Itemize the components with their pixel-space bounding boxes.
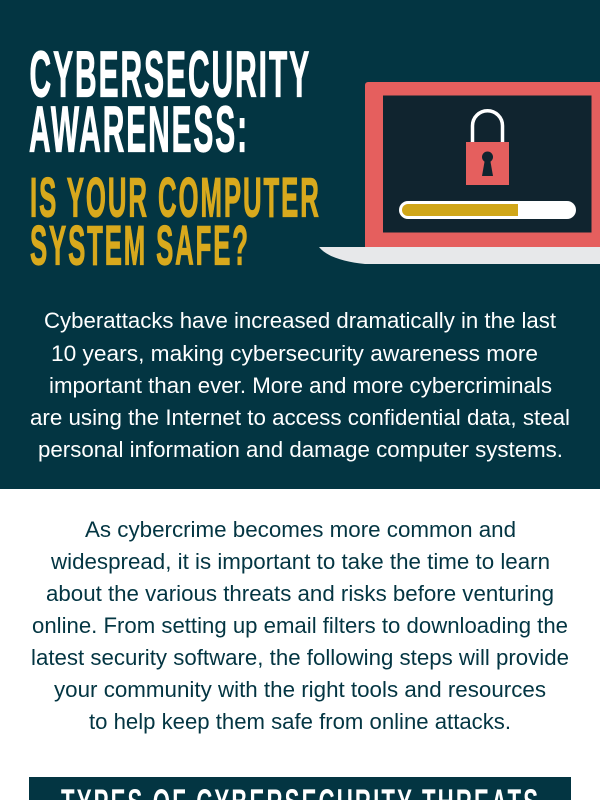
- title: white heading: [29, 37, 309, 166]
- laptop lid: [365, 82, 600, 247]
- text block: body introduction: to help keep them safe from online attacks.: [89, 709, 511, 734]
- title: gold subheading: [30, 168, 319, 277]
- title: white heading: CYBERSECURITY: [30, 37, 309, 111]
- text block: header introduction: personal information and damage computer systems.: [38, 437, 563, 462]
- text block: body introduction: As cybercrime becomes more common and: [85, 517, 516, 542]
- panel: dark header background: [0, 0, 600, 489]
- section heading: types of threats: [29, 777, 571, 800]
- padlock: [466, 111, 509, 185]
- laptop base: [319, 247, 600, 264]
- title: gold subheading: SYSTEM SAFE?: [30, 216, 248, 277]
- text block: body introduction: widespread, it is important to take the time to learn: [50, 549, 550, 574]
- title: gold subheading: IS YOUR COMPUTER: [30, 168, 319, 229]
- progress bar: [399, 201, 576, 219]
- text block: header introduction: are using the Internet to access confidential data, steal: [30, 405, 570, 430]
- title: white heading: AWARENESS:: [29, 92, 247, 166]
- laptop screen: [383, 96, 592, 232]
- text block: header introduction: 10 years, making cybersecurity awareness more: [51, 341, 538, 366]
- icon: laptop with padlock and progress bar: [319, 82, 600, 264]
- text block: body introduction: your community with the right tools and resources: [54, 677, 546, 702]
- text block: body introduction: about the various threats and risks before venturing: [46, 581, 554, 606]
- text block: body introduction: online. From setting up email filters to downloading the: [32, 613, 568, 638]
- text block: header introduction: important than ever. More and more cybercriminals: [49, 373, 552, 398]
- text block: body introduction: [31, 517, 569, 734]
- text block: header introduction: [30, 308, 570, 462]
- text block: body introduction: latest security software, the following steps will provide: [31, 645, 569, 670]
- text block: header introduction: Cyberattacks have increased dramatically in the last: [44, 308, 556, 333]
